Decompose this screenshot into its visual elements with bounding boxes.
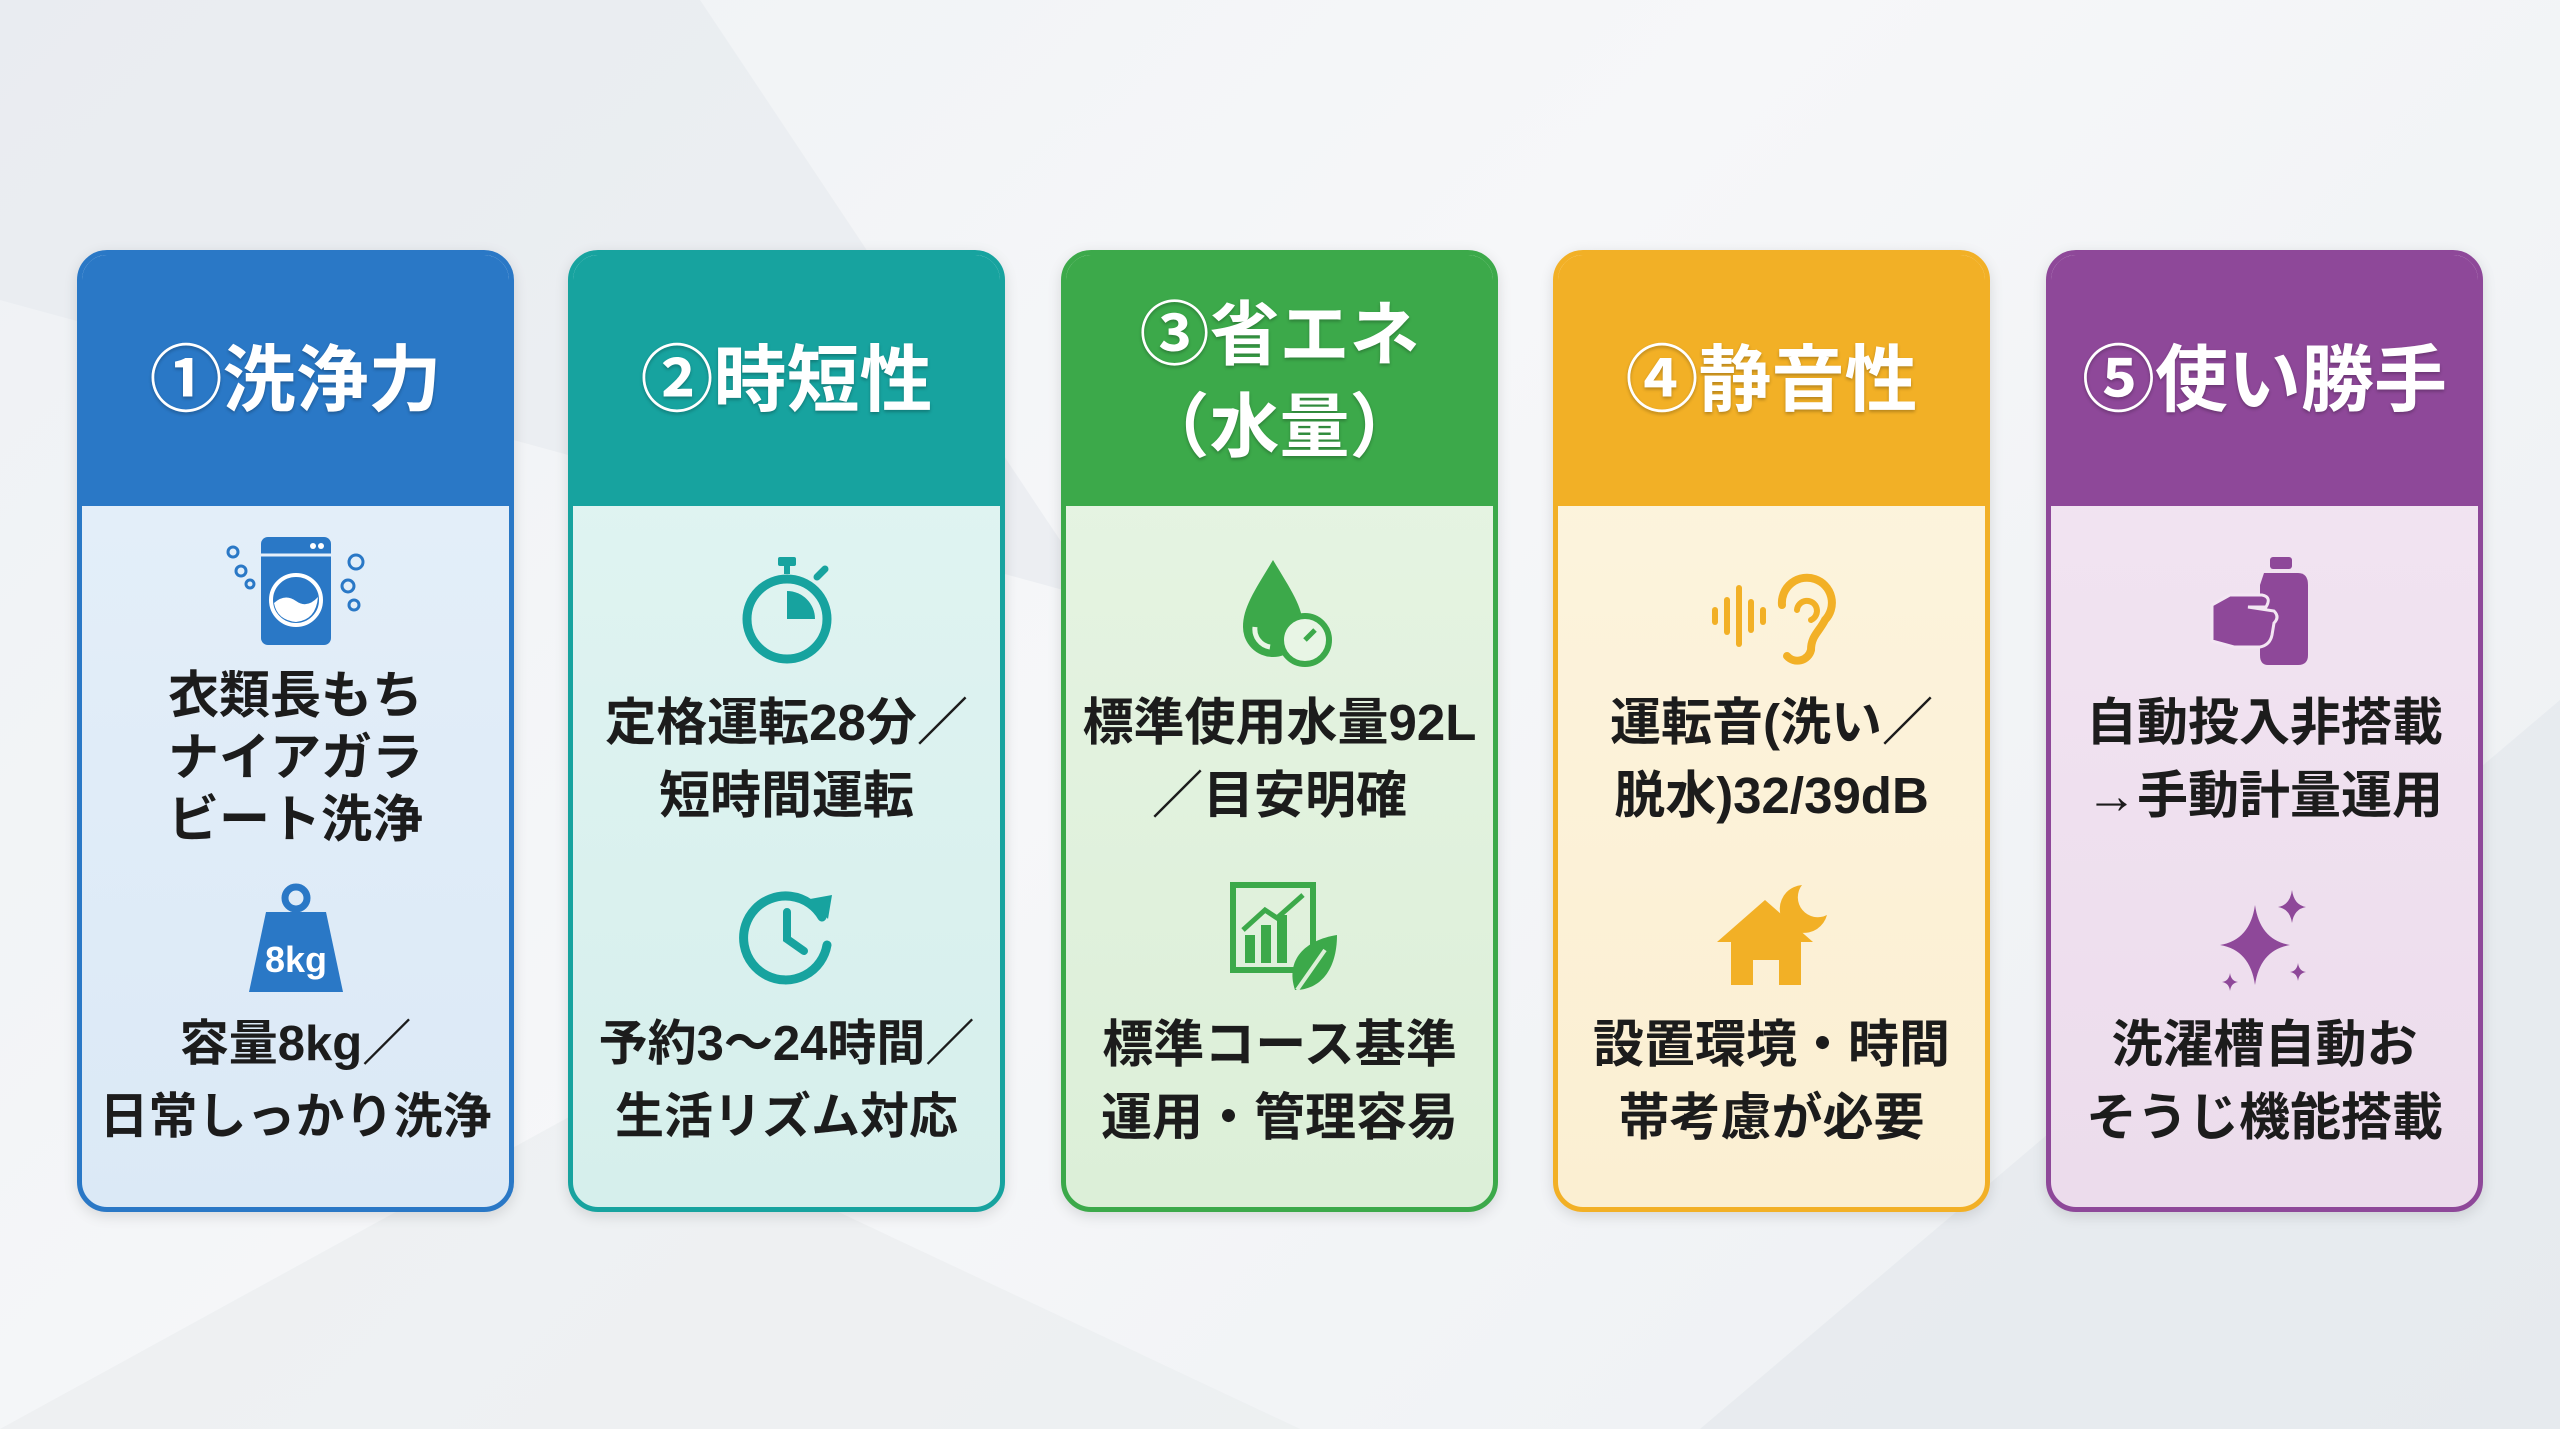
text: 定格運転28分: 短時間運転 (659, 767, 914, 824)
icon: stopwatch (742, 557, 832, 664)
text: 運転音 (1610, 694, 1933, 824)
text: 運転音: 脱水)32/39dB (1614, 767, 1929, 824)
text: 定格運転28分 (605, 694, 968, 824)
text: 標準使用水量92L: 標準使用水量92L (1083, 694, 1476, 751)
text: 標準コース基準: 運用・管理容易 (1101, 1089, 1458, 1146)
icon: water drop gauge (1243, 560, 1332, 667)
text: 衣類長もち: ビート洗浄 (168, 791, 423, 848)
text: 洗濯槽自動おそうじ: そうじ機能搭載 (2086, 1089, 2443, 1146)
text: 予約3〜24時間 (599, 1017, 974, 1144)
icon: chart leaf (1230, 882, 1337, 990)
icon: hand bottle (2214, 557, 2308, 665)
text: 定格運転28分: 定格運転28分／ (605, 694, 968, 751)
text: 洗濯槽自動おそうじ: 洗濯槽自動お (2111, 1016, 2418, 1073)
text: 衣類長もち: ナイアガラ (168, 729, 423, 786)
icon: clock reload (739, 891, 832, 984)
text: 設置環境 (1593, 1016, 1950, 1146)
text: 洗濯槽自動おそうじ (2086, 1016, 2443, 1146)
icon: washing machine (226, 537, 364, 645)
text: 容量8kg: 日常しっかり洗浄 (99, 1090, 492, 1144)
text: 標準使用水量92L (1083, 694, 1476, 824)
heading: 省エネ(水量) (1066, 255, 1493, 506)
icon: weight 8kg (249, 884, 343, 992)
panel: 洗浄力 (77, 250, 514, 1212)
text: 容量8kg: 容量8kg／ (180, 1017, 411, 1071)
panel: 省エネ (1061, 250, 1498, 1212)
text: 運転音: 運転音(洗い／ (1610, 694, 1933, 751)
heading: 洗浄力: ①洗浄力 (150, 340, 442, 420)
heading: 時短性: ②時短性 (640, 340, 932, 420)
text: 設置環境: 設置環境・時間 (1593, 1016, 1950, 1073)
icon: sound ear (1712, 574, 1836, 665)
heading: 使い勝手: ⑤使い勝手 (2082, 340, 2447, 420)
text: 自動投入非搭載: 自動投入非搭載 (2086, 694, 2443, 751)
text: 衣類長もち (168, 667, 423, 848)
heading: 省エネ(水量): ③省エネ (1140, 296, 1420, 374)
text: 設置環境: 帯考慮が必要 (1618, 1089, 1924, 1146)
text: 標準コース基準: 標準コース基準 (1102, 1016, 1457, 1073)
text: 自動投入非搭載: →手動計量運用 (2086, 767, 2443, 824)
panel: 使い勝手 (2046, 250, 2483, 1212)
heading: 時短性 (573, 255, 1000, 506)
text: 標準コース基準 (1101, 1016, 1458, 1146)
text: 標準使用水量92L: ／目安明確 (1152, 767, 1407, 824)
panel: 静音性 (1553, 250, 1990, 1212)
text: 予約3〜24時間: 予約3〜24時間／ (599, 1017, 974, 1071)
text: 衣類長もち: 衣類長もち (168, 667, 423, 724)
icon: weight 8kg: 8kg (264, 939, 327, 980)
icon: house moon (1717, 885, 1827, 985)
heading: 使い勝手 (2051, 255, 2478, 506)
text: 予約3〜24時間: 生活リズム対応 (615, 1090, 958, 1144)
heading: 静音性 (1558, 255, 1985, 506)
icon: sparkles (2220, 890, 2306, 991)
heading: 省エネ(水量): （水量） (1140, 388, 1420, 466)
heading: 洗浄力 (82, 255, 509, 506)
panel: 時短性 (568, 250, 1005, 1212)
heading: 静音性: ④静音性 (1626, 340, 1918, 420)
text: 容量8kg (99, 1017, 492, 1144)
text: 自動投入非搭載 (2086, 694, 2443, 824)
